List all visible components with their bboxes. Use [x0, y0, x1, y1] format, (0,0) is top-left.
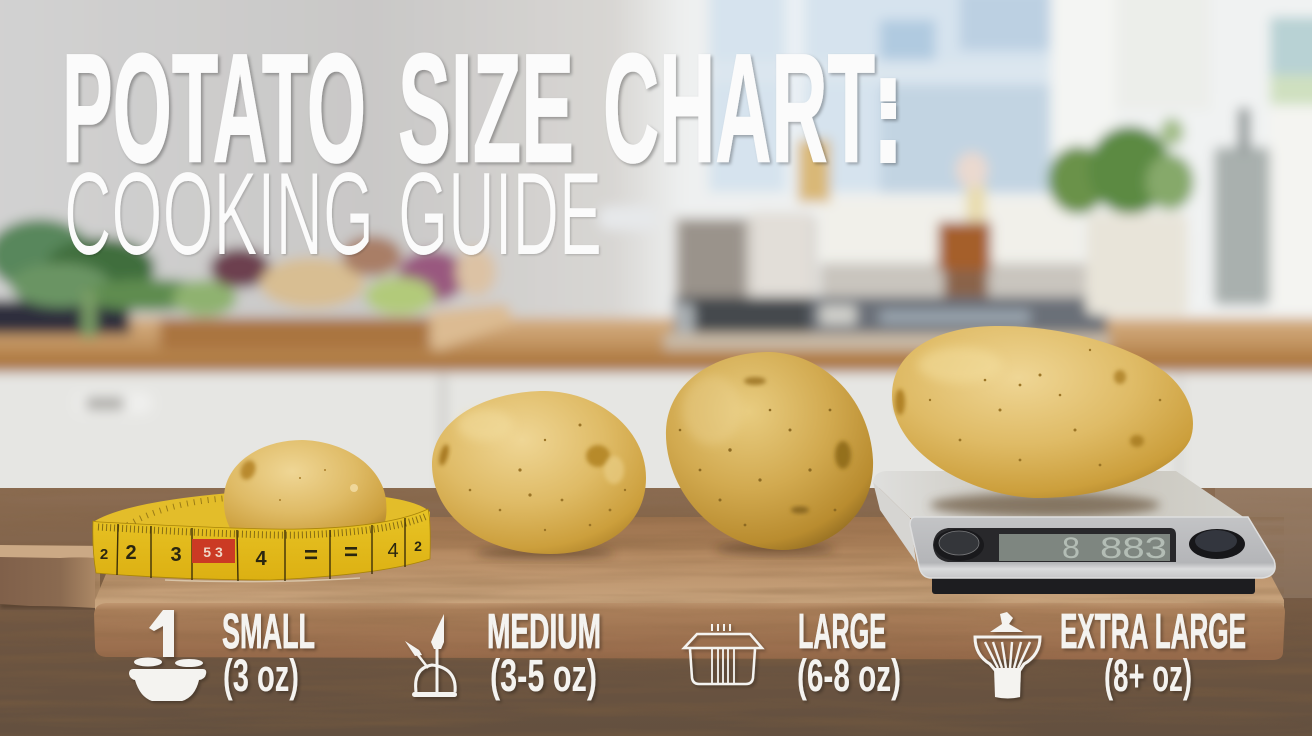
kitchen canister [1214, 108, 1270, 305]
scale display strip [933, 528, 1176, 562]
board front face [94, 603, 1285, 660]
icon: utensils [405, 614, 457, 697]
blurred kitchen background [0, 0, 1312, 502]
tape numbers: 4 [387, 540, 399, 562]
title [62, 11, 906, 279]
tape numbers: 2 [100, 546, 108, 563]
tape numbers: 2 [414, 538, 422, 554]
small label: SMALL [222, 605, 315, 659]
window sill [820, 198, 1080, 262]
tape numbers: 4 [255, 548, 267, 570]
white planter with herbs [1048, 118, 1194, 315]
scale knob [934, 529, 984, 561]
backsplash [820, 263, 1090, 303]
medium label [487, 605, 601, 701]
scale LCD readout: 8 [1062, 532, 1080, 565]
extra large label [1060, 605, 1246, 701]
size labels [129, 605, 1246, 701]
red inch marker [192, 539, 235, 563]
measuring tape front band [93, 509, 430, 582]
board handle [0, 545, 110, 608]
large label: LARGE [798, 605, 886, 659]
icon: whisk bowl with lid [975, 612, 1040, 698]
title line two: COOKING [64, 148, 374, 279]
scale base [932, 574, 1255, 594]
digital kitchen scale [873, 471, 1275, 594]
stove [664, 297, 1110, 350]
tape under-edge highlight [165, 578, 360, 582]
scale front panel [910, 517, 1275, 578]
cutting board [0, 517, 1285, 660]
contact shadows [475, 544, 835, 558]
tape numbers [100, 538, 422, 570]
title line one: CHART [603, 22, 875, 194]
title line one: : [870, 11, 906, 199]
scale LCD readout: 883 [1100, 532, 1167, 565]
tape numbers: 2 [125, 542, 137, 564]
icon: number one over bowl [129, 610, 206, 701]
small potato [224, 440, 386, 545]
scale button [1189, 529, 1245, 559]
scale side face [873, 482, 916, 562]
medium potato [432, 391, 646, 554]
board top face [95, 517, 1284, 612]
vegetables on far counter [0, 219, 516, 350]
large label: (6-8 oz) [797, 650, 901, 701]
medium label: MEDIUM [487, 605, 601, 659]
tape numbers: 3 [170, 544, 182, 566]
tape tick marks [98, 516, 427, 535]
title line one: SIZE [398, 22, 574, 194]
scale LCD readout [999, 532, 1170, 565]
title line two: GUIDE [398, 148, 602, 279]
window [709, 0, 1312, 195]
small label: (3 oz) [223, 650, 299, 701]
cabinets [0, 372, 1312, 502]
title line one [62, 11, 906, 199]
tape numbers: = [304, 542, 318, 569]
wooden table [0, 488, 1312, 736]
tape numbers: 5 3 [203, 544, 223, 560]
small label [222, 605, 315, 701]
far counter top [0, 318, 1312, 372]
scale top plate [873, 471, 1245, 518]
tape inch dividers [117, 518, 405, 581]
terracotta pot [938, 152, 991, 300]
extra large potato [892, 326, 1193, 498]
measuring tape back loop [93, 493, 430, 535]
chopping board with produce [160, 304, 516, 350]
tape numbers: = [344, 539, 358, 566]
bottle [798, 140, 830, 202]
large potato [666, 352, 873, 550]
medium label: (3-5 oz) [490, 650, 597, 701]
large label [797, 605, 901, 701]
title line one: POTATO [62, 22, 366, 194]
icon: lidded pot [684, 624, 762, 684]
stock pot [598, 206, 816, 299]
extra large label: (8+ oz) [1104, 650, 1192, 701]
